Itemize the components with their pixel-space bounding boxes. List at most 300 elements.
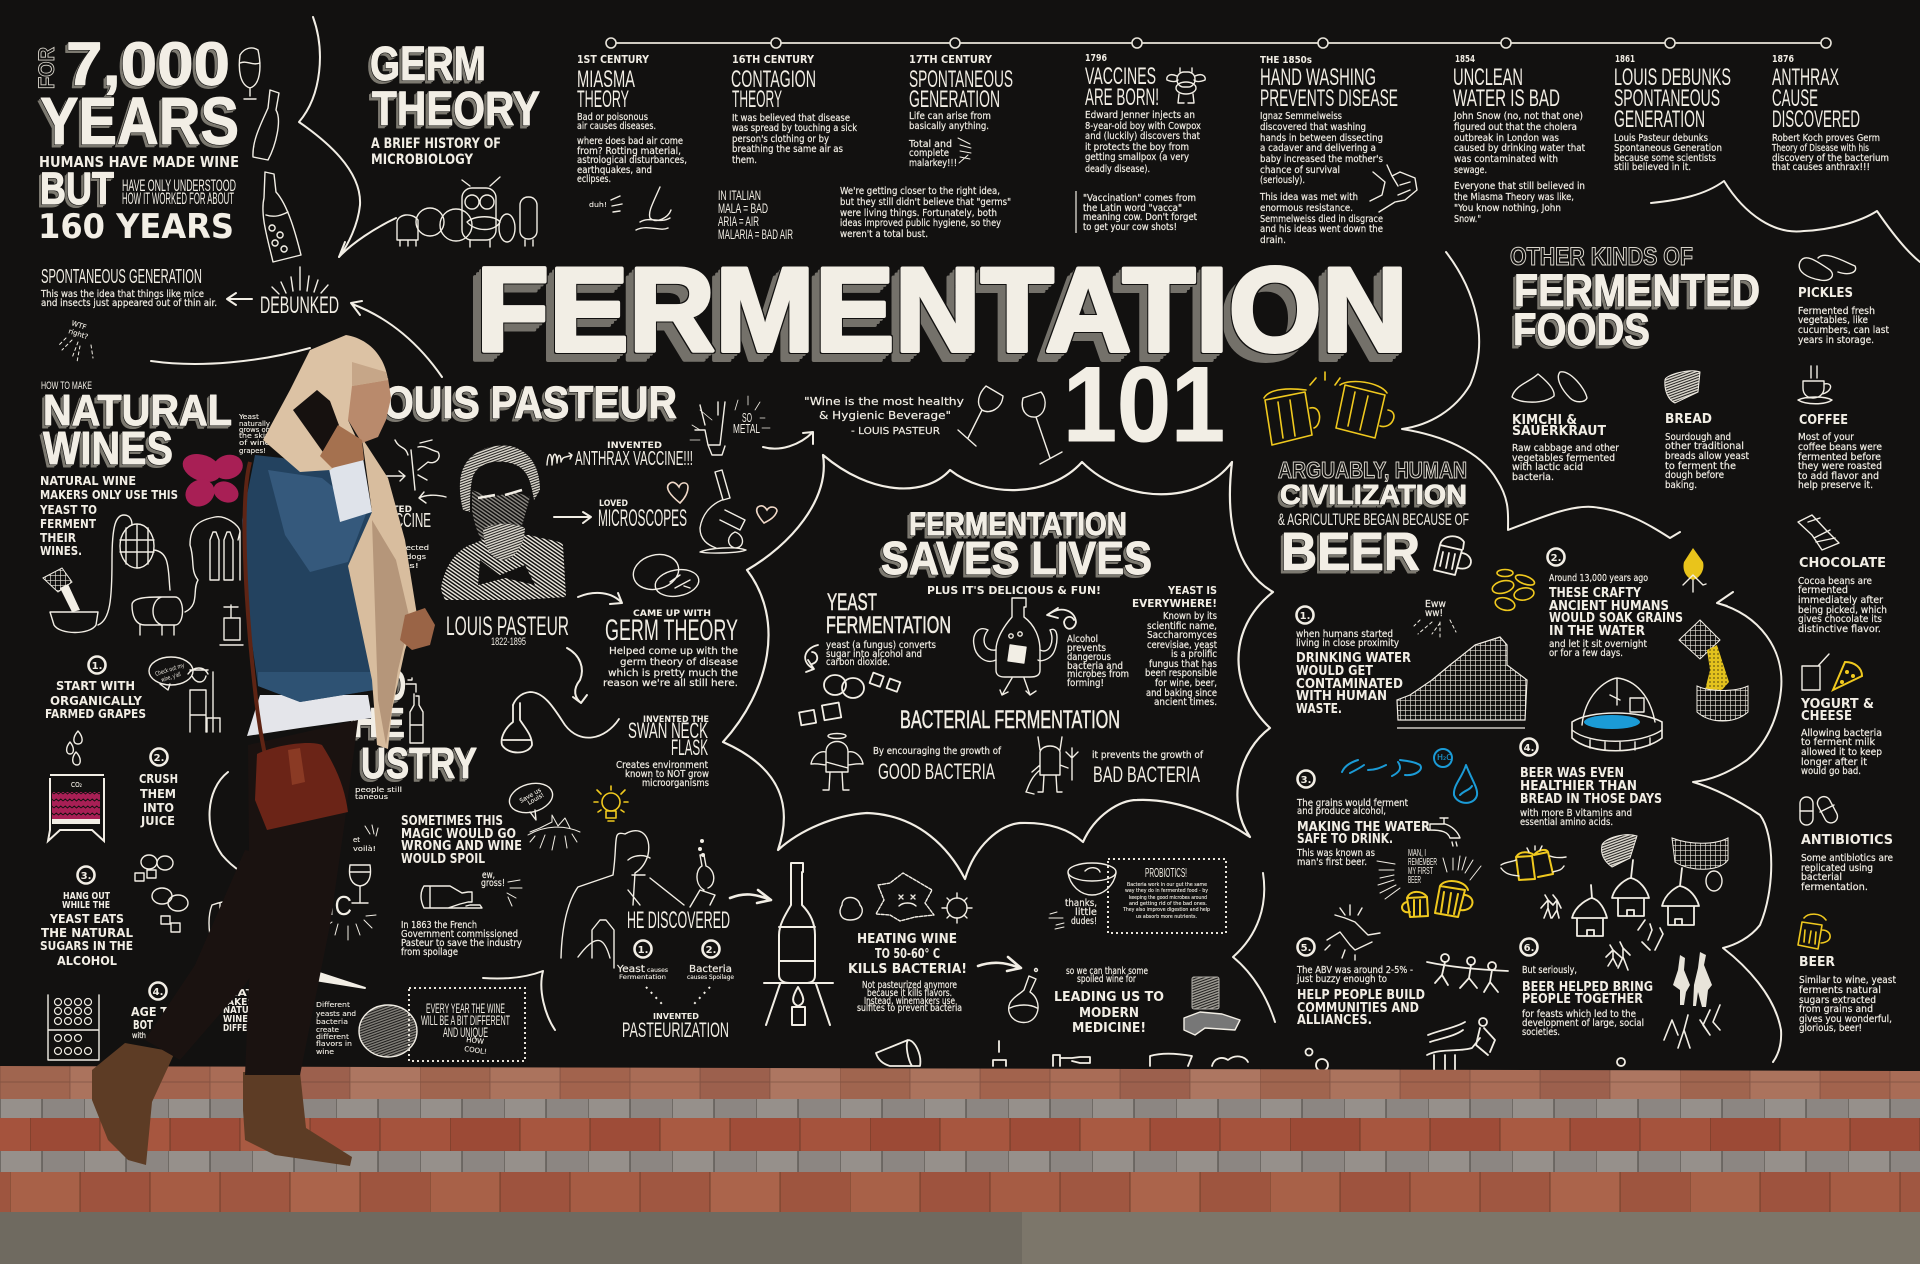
event: hand washing: (seriously). [1260,175,1305,186]
quote: louis pasteur on wine: "Wine is the most healthy [804,396,964,408]
shirt cuff [328,452,372,522]
event: anthrax: Robert Koch proves Germ [1772,133,1880,144]
text: alcohol prevents: prevents [1067,643,1106,654]
note: ew gross: ew, [482,870,495,881]
note: different yeasts: yeasts and [316,1010,356,1018]
note: so metal: SO [742,410,752,425]
icon: clinking yellow mugs with hands [1501,846,1566,880]
text: heating wine: KILLS BACTERIA! [848,962,967,977]
callout: probiotics: us absorb more nutrients. [1136,914,1197,920]
intro text: NATURAL WINE [40,474,136,488]
item: bread: to ferment the [1665,461,1736,472]
label: debunked: DEBUNKED [260,292,339,319]
label: rabies vaccine: ACCINE [387,510,431,532]
note: vaccination: to get your cow shots! [1083,222,1177,233]
discovery 1: 1. [638,945,648,956]
text: alcohol prevents [1067,634,1129,689]
event: unclean water: figured out that the cholera [1454,122,1577,133]
text: leading to modern medicine: so we can thank some [1066,966,1148,977]
panel: other kinds of fermented foods [1510,243,1896,1034]
event: contagion theory: was spread by touching a sick [732,123,857,134]
note: vaccination: meaning cow. Don't forget [1083,212,1197,223]
panel: heating wine [840,859,1275,1066]
event: hand washing: and his ideas went down the [1260,224,1383,235]
note: closer to right idea: We're getting closer to the right idea, [840,186,1000,197]
icon: pill bottle [1184,977,1240,1035]
step 5: just buzzy enough to [1296,974,1387,985]
text: alcohol prevents: bacteria and [1067,661,1123,672]
item: yogurt and cheese: longer after it [1801,757,1867,768]
step 6: But seriously, [1522,965,1577,976]
section divider curves [151,17,396,364]
step 5: COMMUNITIES AND [1297,1001,1419,1016]
note: thanks little dudes: dudes! [1071,916,1097,927]
event: spontaneous generation: Life can arise from [909,111,991,122]
icon: fermentation tank with drops: CO₂ [71,781,82,789]
text: yeast is everywhere: fungus that has [1149,659,1217,670]
section divider curves right [1402,181,1920,1062]
text: leading to modern medicine: spoiled wine for [1077,974,1136,985]
event: contagion theory: 16TH CENTURY [732,53,815,66]
event: vaccines: ARE BORN! [1085,84,1159,111]
item: kimchi: vegetables fermented [1512,453,1615,464]
note: closer to right idea: ideas improved public hygiene, so they [840,218,1001,229]
text: sometimes magic would go wrong: WOULD SPOIL [401,852,485,867]
note: what makes natural wine different: NATURA [223,1005,262,1016]
event: vaccines [1085,53,1201,175]
event: hand washing: Ignaz Semmelweiss [1260,111,1342,122]
phone [293,390,340,455]
bag strap [245,462,266,760]
heading: saved the wine industry: taneous [355,793,388,801]
note: what makes natural wine different: WINE [223,1014,248,1025]
note: different yeasts: flavors in [316,1040,352,1048]
timeline [577,38,1889,246]
step 5: ALLIANCES. [1297,1013,1372,1028]
icon: farmer with speech bubble: Check out my [154,662,185,678]
step 3: This was known as [1296,848,1375,859]
heading: louis pasteur: OUIS PASTEUR [383,377,677,428]
event: unclean water: caused by drinking water that [1454,143,1585,154]
text: 1863 [401,920,522,958]
speech bubble: save us louis: Louis! [526,792,546,807]
heading: beer civilization: ARGUABLY, HUMAN [1278,457,1467,483]
scarf drape [348,438,417,749]
step 6: 6. [1524,943,1534,954]
step 1: living in close proximity [1296,638,1399,649]
note: in italian: MALARIA = BAD AIR [718,226,793,242]
event: unclean water: the Miasma Theory was like, [1454,192,1574,203]
note: man i remember my first beer: MY FIRST [1408,866,1433,877]
title: fermentation: FERMENTATION [476,243,1408,377]
heading: fermented foods [1510,243,1760,355]
text: yeast is everywhere [1132,584,1217,708]
step 3: and produce alcohol, [1297,806,1386,817]
note: vaccination: "Vaccination" comes from [1083,193,1196,204]
step 1: WOULD GET [1296,664,1373,679]
step 2: Around 13,000 years ago [1549,573,1648,584]
label: swan neck flask: microorganisms [642,778,709,789]
back boot [92,1043,175,1165]
icon: yellow beer mugs [1402,881,1472,917]
event: spontaneous generation: GENERATION [909,86,1000,113]
label: swan neck flask: FLASK [671,735,708,760]
icon: barrel [209,901,249,944]
dotted connectors [646,987,710,1004]
event: spontaneous generation: Total and [908,139,952,150]
icon: bottle with bubbles [263,172,301,262]
event: vaccines: getting smallpox (a very [1085,152,1189,163]
step 2: and let it sit overnight [1549,639,1647,650]
note: yeast on grapes: grows on [239,426,270,434]
item: chocolate: being picked, which [1798,605,1887,616]
block: yeast fermentation: yeast (a fungus) converts [826,640,936,651]
item: beer [1798,914,1896,1034]
text: 1863: Pasteur to save the industry [401,938,522,949]
text: alcohol prevents: dangerous [1067,652,1111,663]
step 6 [1520,938,1653,1038]
step 1: DRINKING WATER [1296,651,1411,666]
event: unclean water: Everyone that still believed in [1454,181,1585,192]
icon: spilled bottle [421,886,482,908]
arrow: curved to germ theory [578,593,622,604]
icon: fermentation tank with drops [48,731,104,841]
step 1: 1. [92,661,102,672]
text: yeast is everywhere: Saccharomyces [1147,630,1217,641]
step 1: WITH HUMAN [1296,689,1387,704]
item: antibiotics: Some antibiotics are [1801,853,1893,864]
text: sometimes magic would go wrong: WRONG AND WINE [401,839,522,854]
item: bread: BREAD [1665,412,1712,427]
event: miasma theory: 1ST CENTURY [577,53,650,66]
icon: hearts and microscope [668,470,777,553]
label: pasteurization: INVENTED [653,1012,699,1021]
front boot [243,1072,352,1166]
icon: germ characters [397,177,537,247]
event: vaccines: and (luckily) discovers that [1085,131,1200,142]
item: yogurt and cheese: YOGURT & [1800,697,1874,712]
item: coffee: to add flavor and [1798,471,1879,482]
text: good bacteria [873,746,1002,784]
event: vaccines: deadly disease). [1085,164,1150,175]
event: hand washing: PREVENTS DISEASE [1260,85,1398,112]
intro text: MAKERS ONLY USE THIS [40,488,178,502]
headscarf [263,335,388,472]
callout: probiotics: PROBIOTICS! [1145,865,1187,880]
icon: devil bacteria [1026,737,1078,794]
event: unclean water: "You know nothing, John [1454,203,1561,214]
handbag [255,743,348,830]
event: vaccines: 8-year-old boy with Cowpox [1085,121,1201,132]
discovery 1 [616,940,668,981]
note: closer to right idea: but they still didn't believe that "germs" [840,197,1011,208]
timeline rule [611,42,1826,44]
icon: winemaking process [43,515,243,645]
heading: saved the wine industry: USTRY [361,739,477,788]
event: unclean water: Snow." [1454,214,1481,225]
step 4: 4. [153,987,163,998]
heading: for 7,000 years: FOR [34,47,59,89]
item: chocolate [1798,515,1887,635]
heading: for 7,000 years: HAVE ONLY UNDERSTOOD [122,176,236,195]
step 2: WOULD SOAK GRAINS [1549,611,1683,626]
text: yeast is everywhere: cerevisiae, yeast [1147,640,1217,651]
callout: probiotics [1108,859,1226,933]
event: miasma theory: eclipses. [577,174,611,185]
event: unclean water: WATER IS BAD [1453,85,1560,112]
intro text: YEAST TO [39,503,97,517]
heading: saved the wine industry [352,661,477,801]
text: yeast is everywhere: is a prolific [1171,649,1217,660]
icon: bottle rack [48,995,99,1060]
item: coffee: Most of your [1798,432,1854,443]
icon: water well [1572,678,1662,751]
divider curve [1233,873,1275,1022]
icon: light bulb [594,786,628,821]
arrow: wavy [567,648,587,703]
note: what makes natural wine different: AKES [227,997,254,1008]
main title [476,243,1408,464]
event: unclean water: 1854 [1455,54,1475,65]
step 2: 2. [154,753,164,764]
item: pickles: years in storage. [1798,335,1874,346]
note: wtf right: WTF [70,319,87,332]
heading: natural wines: NATURAL [43,386,232,435]
note: thanks little dudes [1049,898,1097,929]
item: yogurt and cheese: Allowing bacteria [1801,728,1882,739]
icon: bubbles [698,839,705,857]
event: unclean water: was contaminated with [1454,154,1558,165]
intro text: WINES. [40,544,82,558]
item: antibiotics: fermentation. [1801,882,1868,893]
item: pickles: cucumbers, can last [1798,325,1889,336]
label: rabies vaccine: id dogs [396,553,426,561]
intro text [39,474,178,558]
step 4 [1520,738,1662,828]
event: hand washing: chance of survival [1260,165,1340,176]
event: anthrax: that causes anthrax!!! [1772,162,1870,173]
note: vaccination [1076,191,1197,233]
step 4: HEALTHIER THAN [1520,779,1637,794]
text: heating wine: because it kills flavors. [867,988,952,999]
jacket hem [258,672,374,702]
event: vaccines: VACCINES [1085,63,1156,90]
note: closer to right idea: were living things. Fortunately, both [840,208,997,219]
panel: louis pasteur: MICROSCOPES [598,505,687,532]
note: closer to right idea: weren't a total bust. [840,229,928,240]
text: yeast is everywhere: YEAST IS [1167,584,1217,597]
quote: louis pasteur on wine [804,396,964,437]
note: ew gross [481,870,522,906]
label: h2o: H₂O [1437,753,1453,762]
note: in italian [718,187,793,242]
callout: probiotics: They also improve digestion and help [1122,907,1210,913]
event: anthrax [1771,54,1889,173]
item: kimchi: KIMCHI & [1512,413,1577,428]
icon: huts [1572,860,1699,936]
panel: louis pasteur [324,377,833,1042]
heading: natural wines: HOW TO MAKE [41,380,92,392]
event: louis debunks: because some scientists [1614,153,1716,164]
note: what makes natural wine different: IAT [233,988,254,999]
text: good bacteria: By encouraging the growth of [873,746,1002,757]
event: contagion theory: THEORY [732,86,782,113]
quote: louis pasteur on wine: - LOUIS PASTEUR [851,426,940,437]
note: yeast on grapes: grapes! [239,447,266,455]
panel: spontaneous generation debunked [40,266,442,377]
step 2: ANCIENT HUMANS [1549,599,1669,614]
event: louis debunks: LOUIS DEBUNKS [1614,64,1731,91]
note: yeast on grapes [238,413,270,455]
callout: every year the wine: WILL BE A BIT DIFFERENT [421,1012,510,1028]
step 3: man's first beer. [1297,857,1367,868]
label: germ theory: reason we're all still here. [603,678,738,689]
text: bad bacteria: BAD BACTERIA [1093,762,1200,787]
item: yogurt and cheese: to ferment milk [1801,737,1875,748]
discovery 2 [687,940,734,981]
item: beer: from grains and [1799,1004,1873,1015]
event: spontaneous generation: basically anything. [909,121,989,132]
step 3: 3. [81,871,91,882]
icon: yellow clinking mugs [1264,372,1394,445]
label: germ theory: GERM THEORY [605,614,738,647]
note: thanks little dudes: little [1075,907,1097,918]
title: 101: 101 [1063,344,1225,464]
item: chocolate: gives chocolate its [1798,614,1882,625]
event: unclean water: sewage. [1454,165,1487,176]
label: rabies vaccine: ollected [396,544,429,552]
text: heating wine: Instead, winemakers use [864,996,955,1007]
step 3: SUGARS IN THE [40,939,133,953]
headscarf inner fold [352,362,388,386]
note: different yeasts: bacteria [316,1018,348,1026]
speech bubble: save us louis [506,779,556,820]
event: contagion theory [731,53,857,166]
label: germ theory: which is pretty much the [608,668,738,679]
text: leading to modern medicine [1054,966,1164,1036]
callout: probiotics: Bacteria work in our gut the same [1127,882,1208,888]
note: wtf right: right? [67,327,89,341]
event: anthrax: CAUSE [1772,85,1818,112]
callout: every year the wine: COOL! [464,1045,487,1056]
text: alcohol prevents: microbes from [1067,669,1129,680]
note: different yeasts: create [316,1026,339,1034]
icon: washing hands [1370,165,1417,212]
text: heating wine: TO 50-60° C [875,947,940,962]
event: hand washing: hands in between dissecting [1260,133,1383,144]
description: This was the idea that things like mice [40,289,204,300]
note: thanks little dudes: thanks, [1065,898,1097,909]
text: leading to modern medicine: MEDICINE! [1072,1021,1146,1036]
heading: for 7,000 years: HUMANS HAVE MADE WINE [39,153,239,171]
heading: saved the wine industry: D [386,661,406,710]
step 4: with [132,1031,146,1040]
icons: bottom figure and bubbles [1306,1018,1625,1071]
event: contagion theory: breathing the same air as [732,144,843,155]
item: coffee: COFFEE [1799,413,1848,428]
text: leading to modern medicine: MODERN [1079,1006,1139,1021]
step 1 [1296,606,1411,717]
step 4: BOT [133,1018,154,1032]
item: antibiotics: ANTIBIOTICS [1801,833,1893,848]
heading: fermented foods: FERMENTED [1514,265,1760,316]
step 3: MAKING THE WATER [1297,820,1430,835]
description [40,289,217,309]
icon: dog and arrows [386,440,446,503]
step 5: HELP PEOPLE BUILD [1297,988,1425,1003]
icon: vineyard [528,815,580,850]
event: miasma theory: MIASMA [577,66,635,93]
icon: angel bacteria [811,734,863,790]
sidewalk [0,1066,1920,1264]
icon: strong bottle character [974,598,1057,695]
burst outline [723,455,1273,879]
label: anthrax vaccine [547,441,693,470]
arrow: to bottle [730,890,771,903]
label: pasteurization: PASTEURIZATION [622,1019,729,1042]
event: hand washing: baby increased the mother's [1260,154,1383,165]
item: chocolate: fermented [1798,585,1848,596]
step 2 [1548,548,1683,659]
item: bread [1665,371,1749,491]
front leg [245,720,358,1075]
heading: beer civilization [1278,457,1469,582]
text: sometimes magic would go wrong: MAGIC WOULD GO [401,827,516,842]
event: hand washing: a cadaver and delivering a [1260,143,1376,154]
note: in italian: IN ITALIAN [718,187,761,203]
step 3: 3. [1301,775,1311,786]
upper brick row [0,1066,1920,1100]
panel: fermentation saves lives burst [723,455,1273,879]
icon: bottle over candle [764,863,833,1025]
step 6: PEOPLE TOGETHER [1522,992,1643,1007]
panel: for 7,000 years: HOW IT WORKED FOR ABOUT [122,189,234,208]
note: et voila magic [324,825,378,940]
note: et voila magic: IC [328,890,352,921]
curb right [1022,1212,1920,1264]
intro text: THEIR [40,531,76,545]
text: bad bacteria [1092,750,1204,787]
note: ew gross: gross! [481,878,505,889]
heading: saved the wine industry: people still [355,786,402,794]
step 1: ORGANICALLY [50,694,142,708]
step 4 [131,982,169,1040]
heading: germ theory: A BRIEF HISTORY OF [371,136,501,152]
note: man i remember my first beer: BEER [1408,875,1421,886]
heading: natural wines: WINES [43,422,173,474]
panel: germ theory [370,38,540,247]
icon: pasteur line portrait [561,831,715,968]
icon: stick figures holding rope [1427,954,1508,992]
item: bread: baking. [1665,480,1697,491]
item: bread: dough before [1665,470,1724,481]
event: miasma theory: where does bad air come [577,136,683,147]
label: swan neck flask: Creates environment [616,760,708,771]
label: swan neck flask: SWAN NECK [628,718,708,743]
discovery 2: 2. [706,945,716,956]
event: vaccines: Edward Jenner injects an [1085,110,1195,121]
event: miasma theory: earthquakes, and [577,165,652,176]
step 6: development of large, social [1522,1018,1644,1029]
event: miasma theory: duh! [589,201,607,209]
woman walking [92,335,435,1166]
event: unclean water: outbreak in London was [1454,133,1559,144]
step 3 [1296,770,1430,868]
note: different yeasts [316,1001,356,1056]
icon: bowl [1068,863,1116,895]
text: yeast is everywhere: for wine, beer, [1155,678,1217,689]
event: spontaneous generation: SPONTANEOUS [909,66,1013,93]
